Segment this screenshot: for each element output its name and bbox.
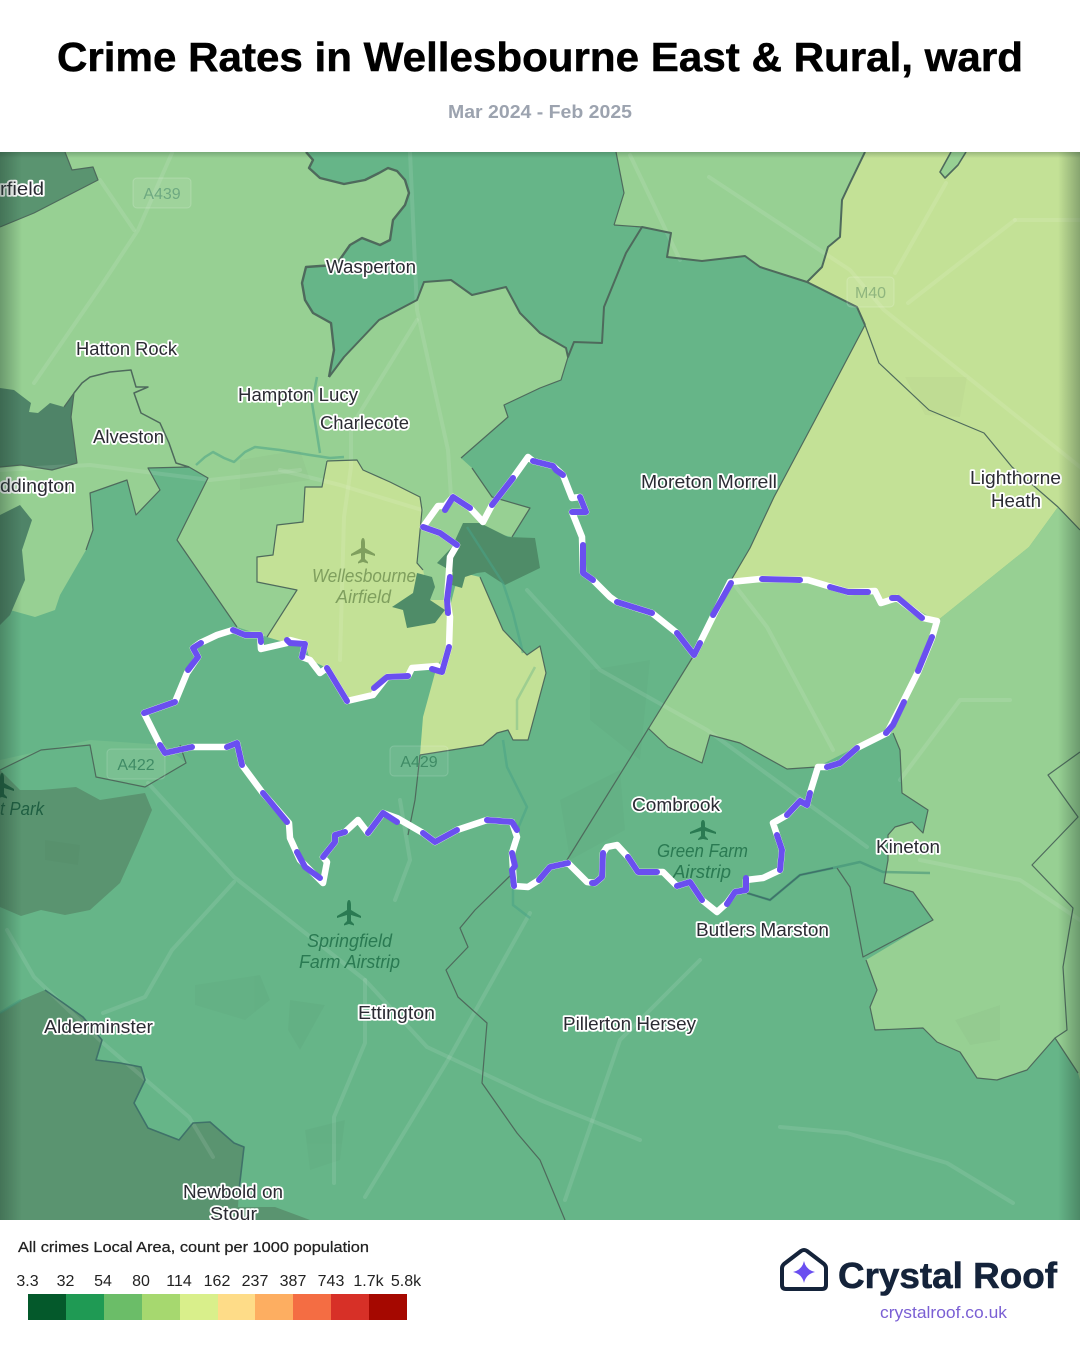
label: Green Farm Airstrip: Green Farm [657, 841, 748, 861]
ward outline: purple dashes [144, 461, 932, 904]
legend values: 80 [132, 1273, 150, 1290]
legend colour scale [28, 1294, 407, 1320]
place labels: Heath [991, 491, 1041, 511]
label: Green Farm Airstrip [657, 841, 748, 882]
header [57, 34, 1023, 122]
legend values: 114 [166, 1273, 192, 1290]
place labels: Wasperton [326, 257, 416, 277]
icon: plane Wellesbourne Airfield [351, 538, 375, 564]
logo: house icon [782, 1250, 826, 1289]
legend values [16, 1273, 422, 1290]
place labels: Ettington [358, 1003, 435, 1023]
area: dark south west [0, 990, 310, 1220]
area: light green east [648, 507, 1080, 1080]
road label: A429 [390, 746, 448, 776]
place labels: Hampton Lucy [238, 385, 358, 405]
roads [0, 152, 1080, 1203]
choropleth map [0, 152, 1080, 1220]
area: dark Alveston [0, 388, 77, 470]
icon: plane Green Farm Airstrip [690, 820, 716, 840]
label: Wellesbourne Airfield: Airfield [335, 587, 392, 607]
area: dark west park [0, 770, 152, 916]
road label: A422: A422 [117, 757, 155, 774]
area: west slightly lighter [0, 740, 186, 787]
footer [16, 1239, 1058, 1322]
title: Crime Rates in Wellesbourne East & Rural, ward [57, 34, 1023, 80]
road label: M40 [847, 277, 894, 307]
place labels: ddington [0, 476, 75, 496]
place labels: Alderminster [44, 1017, 153, 1037]
place labels: Pillerton Hersey [563, 1014, 696, 1034]
legend values: 162 [204, 1273, 230, 1290]
area: dark Wellesbourne north east [437, 523, 540, 588]
place labels: Butlers Marston [696, 920, 829, 940]
place labels: Alveston [93, 427, 164, 447]
label: Springfield Farm Airstrip [299, 931, 400, 972]
legend values: 54 [94, 1273, 112, 1290]
ward outline: white [144, 457, 937, 912]
label: Springfield Farm Airstrip: Farm Airstrip [299, 952, 400, 972]
road label: A429: A429 [400, 754, 438, 771]
icon: plane Springfield Farm Airstrip [337, 900, 361, 926]
area: light green north centre [614, 152, 865, 282]
label: Park: t Park [0, 799, 45, 819]
place labels: Lighthorne [970, 468, 1061, 488]
road label: A422 [107, 749, 165, 779]
legend values: 3.3 [16, 1273, 39, 1290]
area: yellow green north east [730, 152, 1080, 621]
label: Green Farm Airstrip: Airstrip [672, 862, 731, 882]
logo: wordmark: Crystal Roof [838, 1255, 1058, 1296]
legend values: 743 [318, 1273, 344, 1290]
label: Wellesbourne Airfield [312, 566, 416, 607]
area: yellow green Wellesbourne Airfield [257, 460, 450, 701]
legend values: 237 [242, 1273, 268, 1290]
base area: mid green [0, 152, 1080, 1220]
subtitle: Mar 2024 - Feb 2025 [448, 101, 632, 122]
legend values: 32 [57, 1273, 74, 1290]
area: dark far west [0, 505, 32, 625]
area: yellow green south of Wellesbourne [420, 573, 546, 755]
place labels: Newbold on [183, 1182, 283, 1202]
rivers [0, 377, 930, 1013]
place labels [0, 179, 1061, 1224]
place labels: Moreton Morrell [641, 472, 777, 492]
area: dark Wellesbourne west [392, 573, 445, 628]
place labels: Hatton Rock [76, 339, 178, 359]
place labels: Combrook [632, 795, 721, 815]
legend values: 387 [280, 1273, 306, 1290]
place labels: rfield [0, 179, 44, 199]
road label: M40: M40 [855, 285, 886, 302]
ward outline: white line with purple dashes [144, 457, 937, 912]
logo: url: crystalroof.co.uk [880, 1304, 1008, 1322]
area: dark top left [0, 152, 98, 227]
place labels: Charlecote [320, 413, 409, 433]
road label: A439: A439 [143, 186, 181, 203]
icon: plane west park [0, 773, 14, 798]
legend values: 1.7k [353, 1273, 385, 1290]
road label: A439 [133, 178, 191, 208]
label: Wellesbourne Airfield: Wellesbourne [312, 566, 416, 586]
legend values: 5.8k [391, 1273, 422, 1290]
label: Springfield Farm Airstrip: Springfield [307, 931, 393, 951]
area: light green north west [0, 152, 568, 637]
ward and parish boundaries [0, 152, 1080, 1220]
place labels: Kineton [876, 837, 940, 857]
field patches [45, 377, 1000, 1170]
legend title: All crimes Local Area, count per 1000 population [18, 1239, 369, 1256]
